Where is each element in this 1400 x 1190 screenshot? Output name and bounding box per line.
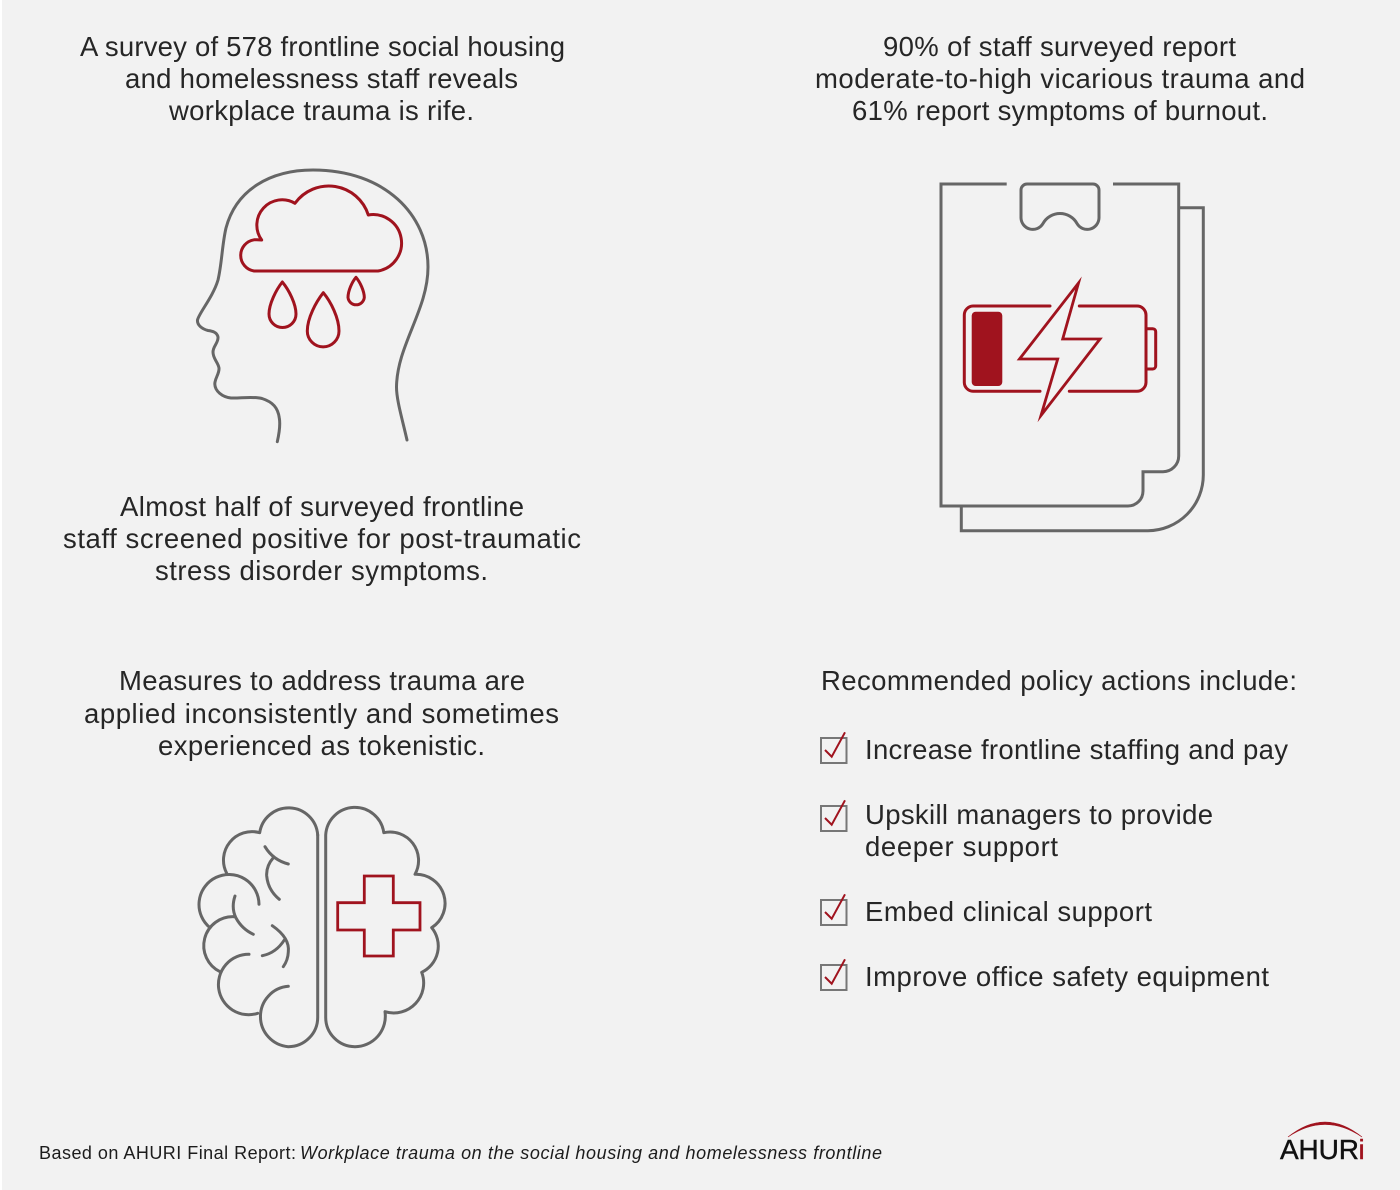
text block: survey of frontline staff: and homelessness staff reveals [125,63,518,94]
text block: survey of frontline staff [80,31,565,126]
clipboard front sheet [941,184,1179,506]
heading: recommended policy actions: Recommended policy actions include: [821,665,1297,696]
icon: head with rain cloud [197,170,428,442]
footer source note [39,1143,882,1163]
icon: rain cloud [241,186,402,271]
checklist: policy actions [821,732,1288,992]
logo: AHURI [1280,1122,1365,1165]
battery terminal [1146,329,1156,369]
brain left hemisphere [199,808,318,1047]
text block: PTSD symptoms: stress disorder symptoms. [155,555,488,586]
text block: PTSD symptoms [63,491,581,586]
icon: rain drop right [348,277,364,305]
item: upskill managers [821,799,1213,862]
text block: inconsistent measures: Measures to address trauma are [119,665,525,696]
text block: vicarious trauma and burnout [815,31,1305,126]
text block: PTSD symptoms: staff screened positive for post-traumatic [63,523,581,554]
lightning bolt [1020,283,1100,416]
brain right hemisphere [326,807,445,1047]
item: clinical support: Embed clinical support [865,896,1152,927]
text block: vicarious trauma and burnout: moderate-to-high vicarious trauma and [815,63,1305,94]
clipboard clip [1021,184,1099,229]
footer source note: Workplace trauma on the social housing and homelessness frontline [300,1143,882,1163]
text block: vicarious trauma and burnout: 90% of staff surveyed report [883,31,1236,62]
item: safety equipment: Improve office safety equipment [865,961,1269,992]
item: upskill managers: Upskill managers to provide [865,799,1213,830]
battery charge level [972,312,1002,386]
icon: rain drop middle [307,293,339,347]
item: staffing and pay: Increase frontline staffing and pay [865,734,1288,765]
logo: AHURI: i [1358,1134,1365,1165]
footer source note: Based on AHURI Final Report: [39,1143,296,1163]
item: upskill managers: deeper support [865,831,1058,862]
text block: inconsistent measures: experienced as tokenistic. [158,730,485,761]
text block: vicarious trauma and burnout: 61% report symptoms of burnout. [852,95,1268,126]
text block: PTSD symptoms: Almost half of surveyed frontline [120,491,524,522]
medical cross [338,876,420,956]
clipboard back sheet [961,208,1203,531]
icon: rain drop left [269,282,296,328]
icon: clipboard with low battery [941,184,1203,531]
text block: survey of frontline staff: A survey of 578 frontline social housing [80,31,565,62]
text block: survey of frontline staff: workplace trauma is rife. [168,95,474,126]
logo: AHURI: AHUR [1280,1134,1359,1165]
text block: inconsistent measures [84,665,559,761]
battery outline [964,306,1146,391]
icon: brain with medical cross [199,807,445,1047]
text block: inconsistent measures: applied inconsistently and sometimes [84,698,559,729]
